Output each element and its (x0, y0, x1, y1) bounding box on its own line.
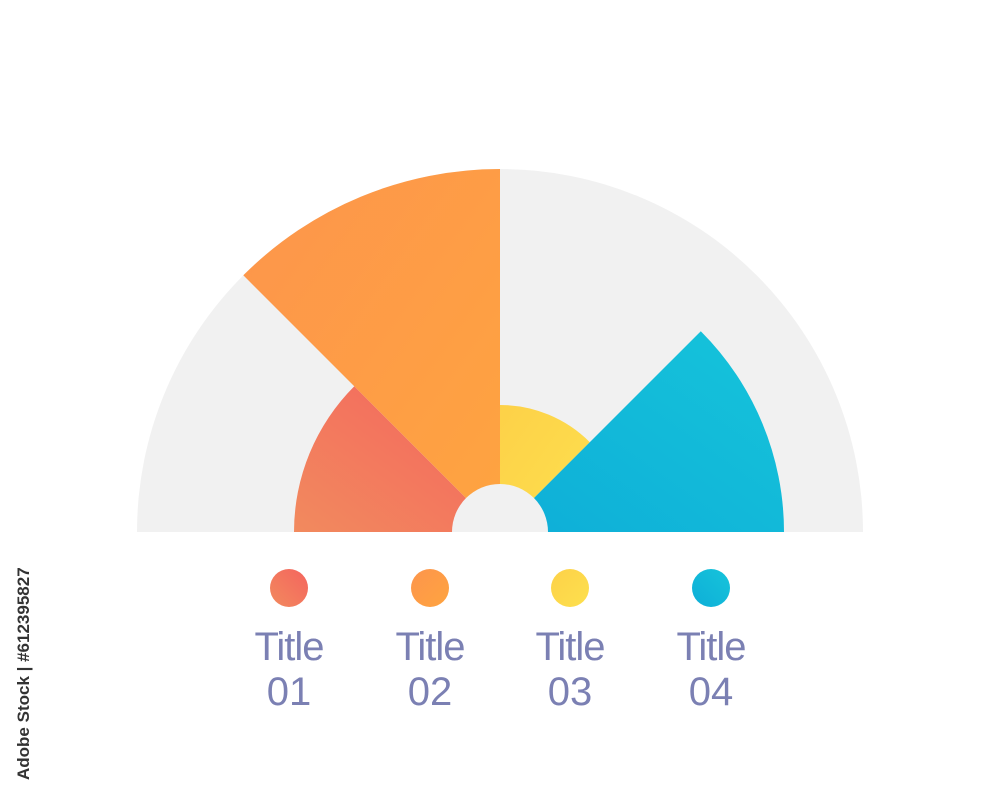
sector: title 01 red (294, 386, 500, 532)
sector: title 03 yellow (500, 405, 590, 532)
legend item 04: 04 (689, 670, 733, 714)
legend item 02: 02 (408, 670, 452, 714)
legend item 01 (254, 569, 324, 714)
legend item 01: 01 (267, 670, 311, 714)
legend item 02: Title (395, 625, 465, 669)
center hole (452, 484, 548, 532)
sector: title 02 orange (243, 169, 500, 532)
legend item 03: 03 (548, 670, 592, 714)
legend item 04 (676, 569, 746, 714)
sector: title 04 blue (500, 331, 784, 532)
background semicircle (137, 169, 863, 532)
legend item 03 (535, 569, 605, 714)
legend item 02 (395, 569, 465, 714)
legend item 01: Title (254, 625, 324, 669)
stock id vertical text: Adobe Stock | #612395827 (14, 567, 33, 780)
legend item 03: Title (535, 625, 605, 669)
legend item 04: Title (676, 625, 746, 669)
